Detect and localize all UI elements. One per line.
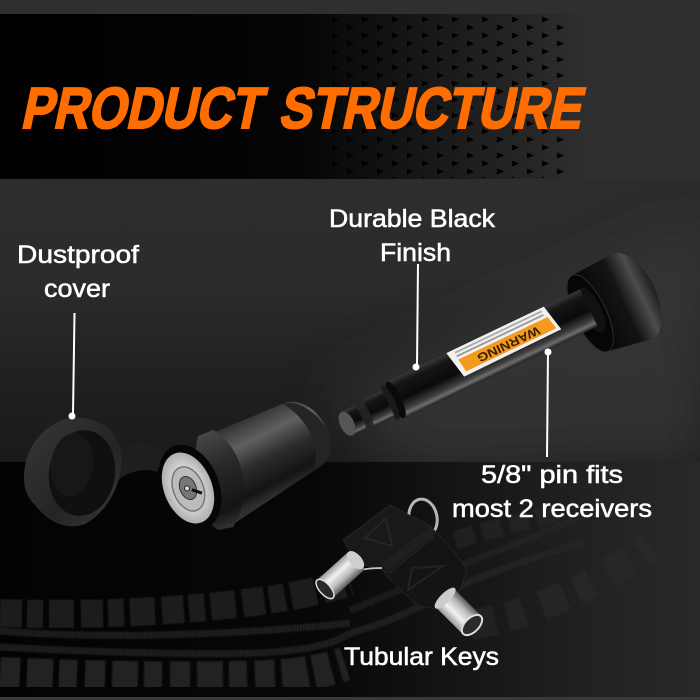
key ring: [406, 497, 440, 539]
strap: [116, 442, 166, 482]
callout: durable black finish: [329, 205, 496, 370]
warning label: WARNING: [475, 323, 542, 365]
lock end collar: [283, 403, 331, 471]
pin tip: [335, 405, 367, 438]
lock face: [152, 445, 224, 531]
callout: pin size: most 2 receivers: [452, 495, 652, 523]
callout: tubular keys: Tubular Keys: [344, 643, 499, 671]
key 2 tip: [432, 585, 487, 640]
callout: dustproof cover: [17, 241, 139, 420]
callout: durable black finish: Finish: [380, 239, 451, 267]
title: STRUCTURE: [275, 77, 591, 141]
callout: pin size: [452, 348, 652, 523]
pin head: [557, 244, 674, 365]
tire tracks: [0, 510, 650, 678]
callout: pin size: 5/8" pin fits: [481, 461, 623, 489]
lock cylinder: [147, 402, 331, 539]
lock body: [215, 402, 331, 525]
warning label: [446, 304, 562, 379]
title: [17, 77, 591, 141]
dustproof cover: [24, 417, 166, 526]
key 1 tip: [313, 548, 369, 602]
callout: dustproof cover: cover: [44, 275, 110, 303]
title: PRODUCT: [17, 77, 271, 141]
pin shaft: [389, 289, 598, 418]
hitch pin: [324, 244, 674, 476]
callout: durable black finish: Durable Black: [329, 205, 496, 233]
rear key: [343, 505, 433, 573]
lock collar: [195, 430, 244, 530]
title banner: [0, 14, 700, 179]
tubular keys: [313, 497, 487, 640]
callout: dustproof cover: Dustproof: [17, 241, 139, 269]
front key: [384, 528, 467, 610]
